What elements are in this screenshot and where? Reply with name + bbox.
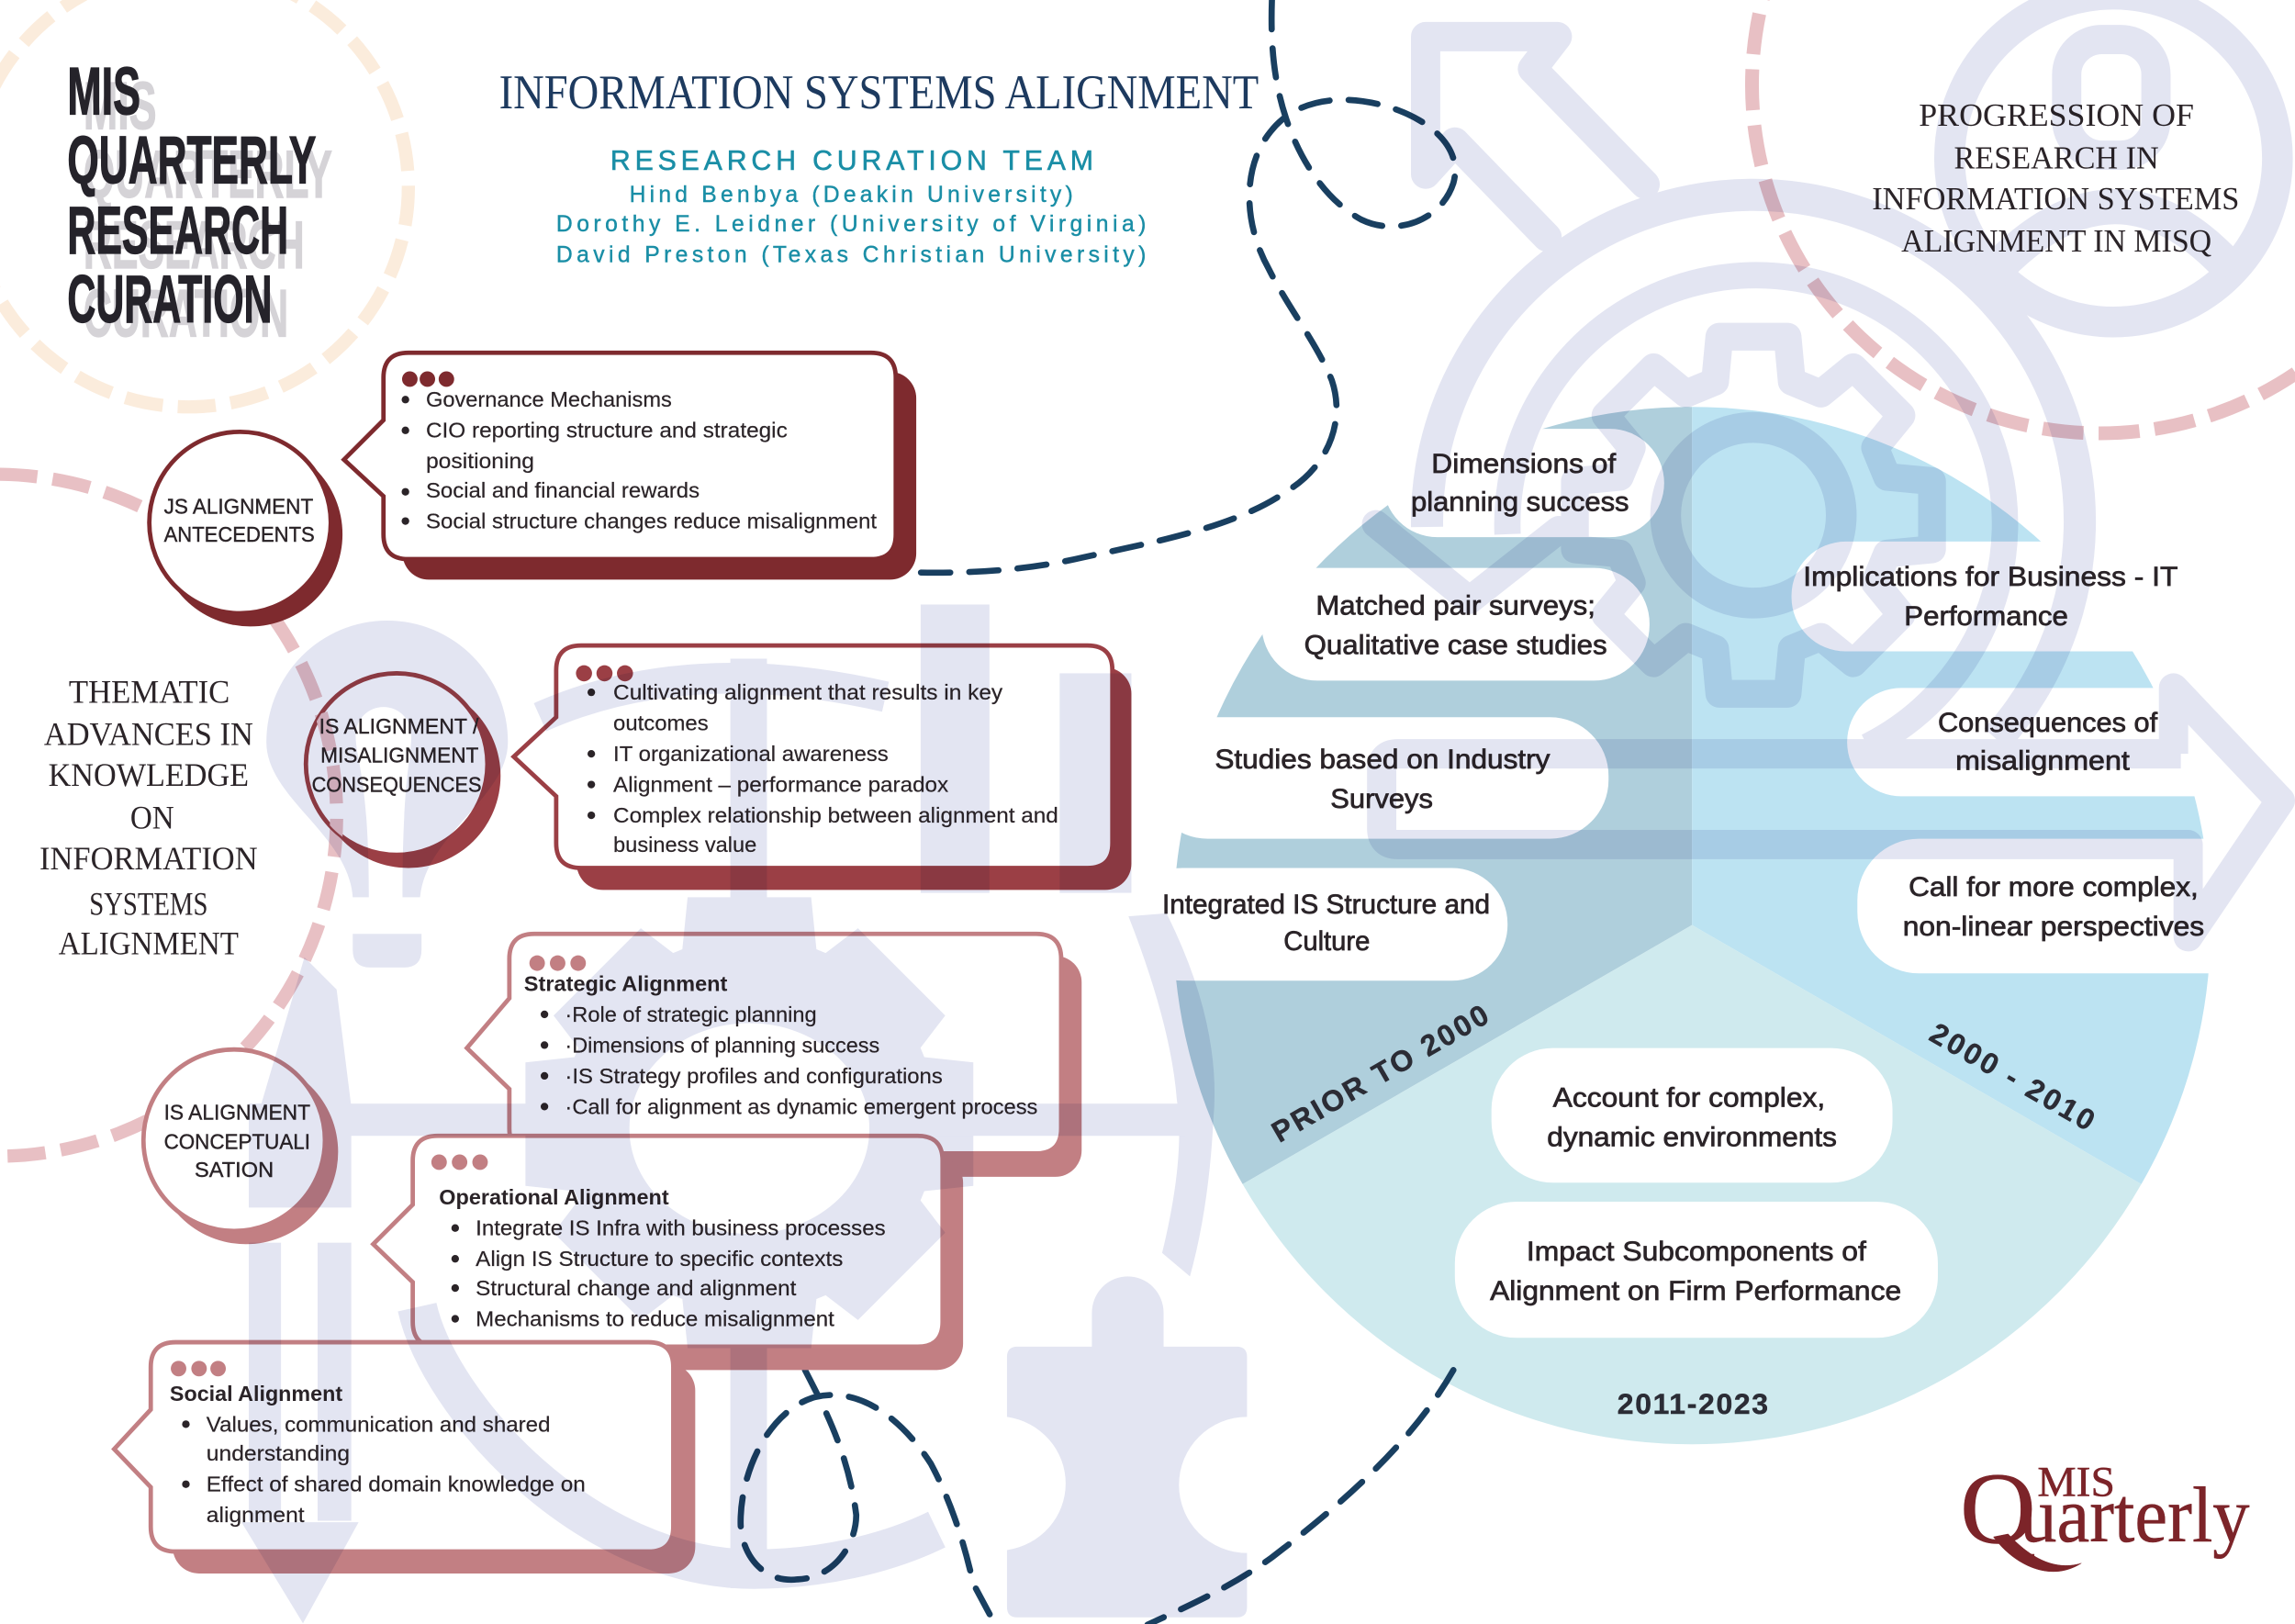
icon: bars and arc <box>540 604 1131 1588</box>
card: operational alignment <box>374 1136 963 1370</box>
pill labels: misalignment <box>1955 746 2131 777</box>
card: IS alignment consequences <box>514 645 1131 890</box>
heading: progression of research <box>1872 97 2239 259</box>
icon: right arrow outline <box>1382 688 2280 936</box>
pill labels: Implications for Business - IT <box>1803 562 2177 592</box>
icon: lower arc <box>417 1307 936 1569</box>
pie chart: progression of research <box>1127 407 2289 1444</box>
card: operational alignment: Integrate IS Infra with business processes <box>476 1216 886 1240</box>
icon: puzzle piece <box>1007 1276 1247 1618</box>
card: operational alignment: Structural change and alignment <box>476 1276 797 1300</box>
dashed ring: top left peach <box>0 0 409 407</box>
pill labels: Impact Subcomponents of <box>1527 1237 1867 1267</box>
pill labels: Matched pair surveys; <box>1315 591 1595 622</box>
card: social alignment: Effect of shared domain knowledge on <box>207 1473 586 1496</box>
icon: right crescent <box>1128 913 1215 1276</box>
pill labels: Performance <box>1904 601 2068 632</box>
circle: IS alignment conceptualisation: SATION <box>195 1158 274 1182</box>
circle: JS alignment antecedents: JS ALIGNMENT <box>164 495 313 519</box>
icon: upper left arrow <box>1426 37 1645 237</box>
heading: thematic advances: SYSTEMS <box>89 886 207 923</box>
card: IS alignment consequences: Complex relationship between alignment and <box>613 803 1058 827</box>
icon: outlined gear <box>1575 337 1932 694</box>
pill backgrounds <box>1127 429 2289 1338</box>
card: strategic alignment <box>467 934 1081 1177</box>
pill labels: Integrated IS Structure and <box>1162 890 1490 920</box>
card: IS alignment antecedents: Governance Mechanisms <box>426 387 672 411</box>
pill labels: Consequences of <box>1938 708 2158 738</box>
logo: MIS Quarterly <box>1960 1452 2250 1572</box>
title: MIS Quarterly research curation: CURATION <box>84 276 288 352</box>
pill labels: non-linear perspectives <box>1903 912 2204 942</box>
circle: IS alignment consequences <box>303 671 501 868</box>
circle: IS alignment consequences: MISALIGNMENT <box>320 744 478 767</box>
pill labels: Studies based on Industry <box>1215 745 1551 775</box>
logo: MIS Quarterly: MIS <box>2037 1458 2115 1505</box>
navy dashed line: pie to bottom <box>1148 1370 1453 1624</box>
card: IS alignment consequences: Alignment – performance paradox <box>613 773 949 797</box>
pill labels: Dimensions of <box>1431 449 1617 479</box>
pill labels: Alignment on Firm Performance <box>1490 1276 1901 1306</box>
circle: IS alignment consequences: IS ALIGNMENT / <box>319 714 479 738</box>
card: social alignment: alignment <box>207 1503 305 1527</box>
card: IS alignment antecedents: CIO reporting structure and strategic <box>426 419 788 442</box>
card: strategic alignment: ·Role of strategic planning <box>565 1002 817 1026</box>
circle: JS alignment antecedents: ANTECEDENTS <box>164 522 315 546</box>
dashed ring: left pink <box>0 475 337 1157</box>
card: IS alignment antecedents: Social and financial rewards <box>426 478 700 502</box>
circle: JS alignment antecedents <box>150 431 342 626</box>
icon: filled gear <box>525 897 973 1348</box>
navy dashed line: top loop <box>911 0 1455 573</box>
card: operational alignment: Align IS Structure to specific contexts <box>476 1247 843 1271</box>
logo: MIS Quarterly: Q <box>1960 1452 2036 1565</box>
title: MIS Quarterly research curation: MIS <box>84 68 157 143</box>
label: 2000-2010: 2000 - 2010 <box>1924 1016 2100 1137</box>
icon: lightbulb <box>266 621 508 968</box>
card: IS alignment consequences: outcomes <box>613 711 709 735</box>
text block: research curation team: Dorothy E. Leidner (University of Virginia) <box>556 212 1146 237</box>
heading: thematic advances: ALIGNMENT <box>59 925 239 962</box>
circle: IS alignment conceptualisation <box>143 1049 338 1244</box>
card: strategic alignment: ·IS Strategy profiles and configurations <box>565 1064 943 1088</box>
label: prior to 2000: PRIOR TO 2000 <box>1266 998 1495 1148</box>
icon: concentric rings <box>1427 195 2080 746</box>
pill labels <box>1162 449 2204 1306</box>
pill labels: Culture <box>1283 926 1370 957</box>
heading: information systems alignment: INFORMATION SYSTEMS ALIGNMENT <box>499 66 1259 119</box>
card: IS alignment antecedents <box>344 353 916 579</box>
heading: thematic advances <box>39 673 258 962</box>
card: IS alignment consequences: business value <box>613 833 756 857</box>
text block: research curation team <box>556 146 1146 267</box>
icon: top right person <box>1950 0 2278 322</box>
logo: MIS Quarterly: uarterly <box>2020 1471 2250 1559</box>
title: MIS Quarterly research curation: QUARTERLY <box>84 137 332 212</box>
icon: down chevron <box>1376 524 1559 600</box>
pill labels: dynamic environments <box>1547 1122 1837 1152</box>
icon: pencil bars <box>241 958 1185 1623</box>
text block: research curation team: Hind Benbya (Deakin University) <box>630 183 1073 207</box>
label: 2011-2023: 2011-2023 <box>1618 1387 1768 1420</box>
heading: progression of research: INFORMATION SYSTEMS <box>1872 181 2239 217</box>
circle: IS alignment conceptualisation: IS ALIGNMENT <box>164 1101 310 1125</box>
title: MIS Quarterly research curation: MIS <box>67 53 140 129</box>
card: IS alignment consequences: IT organizational awareness <box>613 742 889 766</box>
heading: progression of research: RESEARCH IN <box>1954 140 2159 175</box>
card: strategic alignment: ·Dimensions of planning success <box>565 1033 879 1057</box>
card: social alignment: Values, communication and shared <box>207 1412 550 1436</box>
title: MIS Quarterly research curation: QUARTERLY <box>67 122 316 197</box>
wedge: 2011-2023 <box>1243 925 2142 1444</box>
circle: IS alignment consequences: CONSEQUENCES <box>312 773 482 797</box>
heading: progression of research: PROGRESSION OF <box>1919 97 2194 133</box>
heading: thematic advances: KNOWLEDGE <box>49 756 249 793</box>
card: social alignment: understanding <box>207 1441 350 1465</box>
pill labels: Call for more complex, <box>1909 872 2199 902</box>
card: operational alignment: Operational Alignment <box>439 1185 669 1209</box>
heading: thematic advances: ON <box>130 799 174 835</box>
card: social alignment: Social Alignment <box>170 1382 342 1406</box>
card: IS alignment antecedents: Social structure changes reduce misalignment <box>426 510 878 533</box>
heading: thematic advances: ADVANCES IN <box>44 716 253 753</box>
text block: research curation team: RESEARCH CURATION TEAM <box>610 146 1093 176</box>
card: strategic alignment: ·Call for alignment as dynamic emergent process <box>565 1094 1037 1118</box>
pill labels: Surveys <box>1330 784 1433 814</box>
card: strategic alignment: Strategic Alignment <box>524 971 728 995</box>
heading: thematic advances: INFORMATION <box>39 840 258 877</box>
card: IS alignment consequences: Cultivating alignment that results in key <box>613 680 1003 704</box>
pill labels: Account for complex, <box>1553 1082 1825 1113</box>
title: MIS Quarterly research curation: RESEARCH <box>67 193 288 268</box>
title: MIS Quarterly research curation <box>67 53 332 352</box>
card: operational alignment: Mechanisms to reduce misalignment <box>476 1307 834 1331</box>
circle: IS alignment conceptualisation: CONCEPTUALI <box>164 1130 310 1154</box>
card: IS alignment antecedents: positioning <box>426 449 534 473</box>
title: MIS Quarterly research curation: CURATION <box>67 262 273 337</box>
wedge: 2000-2010 <box>1692 407 2211 1184</box>
pill labels: Qualitative case studies <box>1304 631 1607 661</box>
wedge: prior to 2000 <box>1173 407 1692 1184</box>
pill labels: planning success <box>1411 487 1629 517</box>
title: MIS Quarterly research curation: RESEARCH <box>84 207 305 283</box>
card: social alignment <box>114 1342 695 1574</box>
navy dashed line: bottom loop <box>741 1370 995 1624</box>
dashed ring: top right pink <box>1752 0 2295 433</box>
heading: thematic advances: THEMATIC <box>69 673 230 710</box>
text block: research curation team: David Preston (Texas Christian University) <box>556 242 1146 267</box>
heading: progression of research: ALIGNMENT IN MISQ <box>1901 223 2211 259</box>
